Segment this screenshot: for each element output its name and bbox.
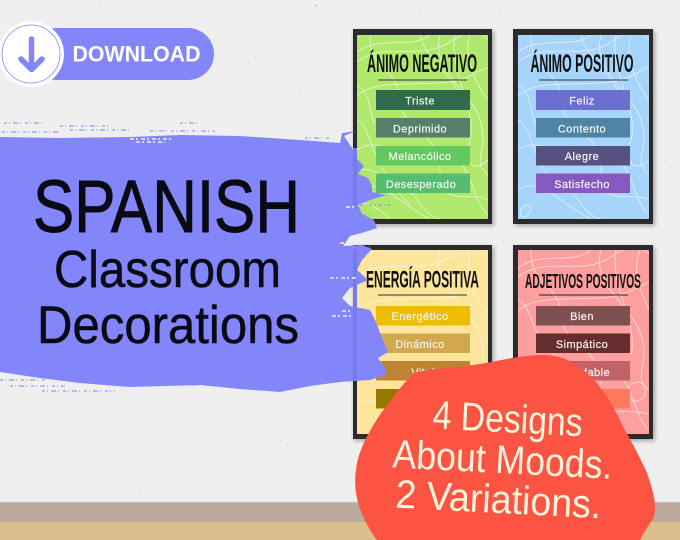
mood list: Desesperado — [386, 179, 456, 191]
mood list: Agradable — [556, 367, 610, 379]
mood list: Melancólico — [388, 151, 452, 163]
mood list: Vital — [411, 367, 435, 379]
poster: animo negativo — [353, 29, 494, 226]
brush darkened frame overlap — [353, 148, 357, 380]
poster title: ÁNIMO NEGATIVO — [367, 49, 477, 78]
title: Decorations: Decorations — [37, 296, 299, 355]
mood list: Energético — [391, 311, 449, 323]
purple brush stroke banner — [0, 123, 395, 392]
red blob callout — [355, 355, 655, 540]
mood list: Deprimido — [393, 124, 447, 136]
mood list — [536, 90, 630, 193]
mood list: Simpático — [556, 339, 608, 351]
download button — [0, 21, 214, 87]
title: Classroom: Classroom — [54, 241, 281, 299]
mood list: Feliz — [569, 96, 595, 108]
mood list: Alegre — [565, 151, 599, 163]
floor — [0, 502, 680, 540]
poster: energia positiva — [353, 245, 494, 441]
mood list: Dinámico — [395, 339, 445, 351]
mood list: Triste — [405, 96, 435, 108]
poster: animo positivo — [513, 29, 655, 226]
poster title: ENERGÍA POSITIVA — [366, 266, 479, 294]
mood list: Bien — [570, 311, 594, 323]
title: SPANISH: SPANISH — [33, 165, 300, 248]
mood list — [536, 306, 630, 408]
callout text: 4 Designs — [432, 393, 584, 445]
download label: DOWNLOAD — [72, 42, 200, 66]
mood list: Satisfecho — [554, 179, 610, 191]
icon: down arrow — [21, 39, 42, 70]
callout text: About Moods. — [392, 432, 614, 488]
brush specks: top edge — [0, 123, 330, 391]
callout text: 2 Variations. — [394, 473, 602, 527]
mood list — [376, 90, 470, 193]
mood list: Contento — [558, 124, 606, 136]
mood list — [376, 306, 470, 408]
brush specks: right edge — [130, 139, 356, 316]
callout text — [389, 391, 616, 528]
poster: adjetivos positivos — [513, 245, 655, 441]
